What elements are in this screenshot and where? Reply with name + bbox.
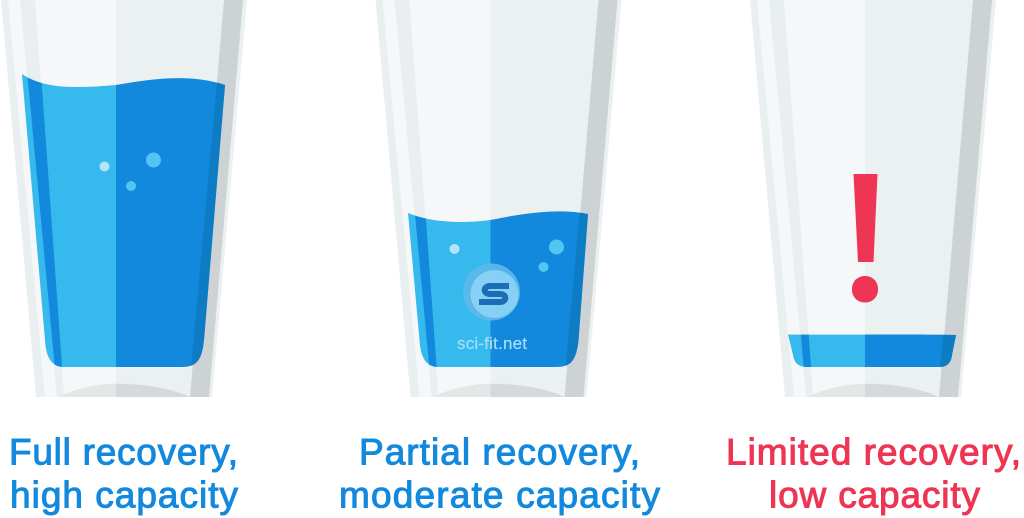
caption: full recovery: high capacity (10, 474, 238, 516)
bubbles (100, 152, 161, 191)
caption: full recovery: Full recovery, (9, 432, 238, 472)
watermark text: sci-fit.net (457, 334, 527, 353)
glass: partial recovery (374, 0, 622, 397)
water: medium level (408, 211, 588, 367)
water: low level (788, 334, 956, 367)
glass: full recovery (0, 0, 248, 397)
water: high level (22, 74, 225, 367)
caption: limited recovery: Limited recovery, (726, 432, 1021, 472)
caption: partial recovery: moderate capacity (339, 474, 660, 516)
watermark logo (463, 264, 520, 320)
glass: limited recovery (749, 0, 997, 397)
caption: partial recovery: Partial recovery, (359, 432, 640, 472)
bubbles (450, 240, 564, 272)
caption: limited recovery: low capacity (769, 474, 980, 516)
icon: exclamation mark (852, 174, 878, 302)
